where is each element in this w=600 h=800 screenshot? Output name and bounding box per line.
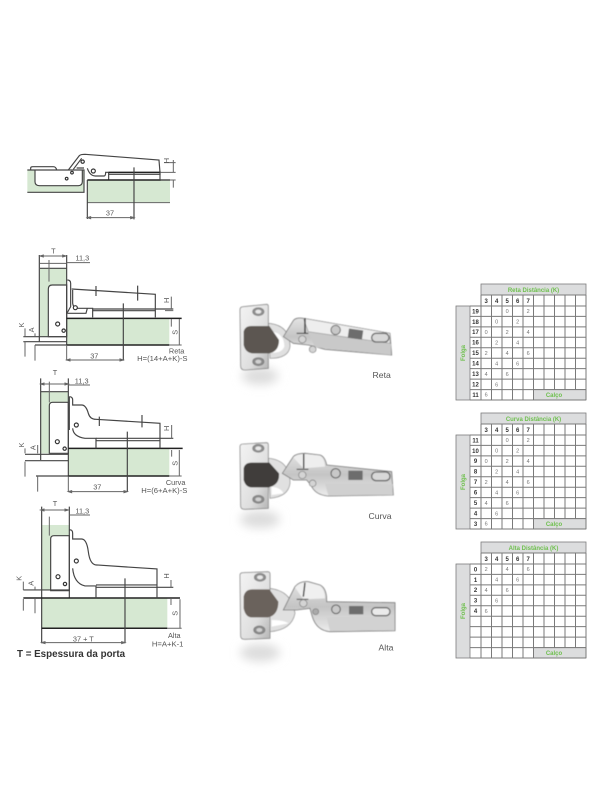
diagram: Curva mounting: Curva <box>166 478 186 487</box>
table: Curva: 0 <box>506 438 509 444</box>
diagram: Reta mounting: H <box>162 298 171 303</box>
diagram: Curva mounting: H=(6+A+K)-S <box>141 486 187 495</box>
diagram: Alta mounting: H <box>162 573 171 579</box>
table: Reta: 5 <box>506 299 510 305</box>
photo: Curva hinge: Curva <box>368 511 392 521</box>
table: Alta: 3 <box>474 599 478 605</box>
diagram: Curva mounting: T <box>53 368 58 377</box>
table: Reta: 6 <box>495 382 498 388</box>
table: Curva: 0 <box>495 449 498 455</box>
table: Alta: 6 <box>527 567 530 573</box>
table: Alta: Calço <box>546 651 563 657</box>
photo: Reta hinge <box>240 304 392 385</box>
diagram: Curva mounting: 37 <box>93 482 101 491</box>
diagram: Reta mounting: H=(14+A+K)-S <box>137 354 188 363</box>
diagram: Reta mounting: T <box>51 246 56 255</box>
table: Curva: Folga <box>461 473 467 490</box>
table: Curva: 4 <box>527 459 530 465</box>
table: Reta: 4 <box>485 372 488 378</box>
table: Alta: 0 <box>474 567 478 573</box>
table: Reta: 6 <box>506 372 509 378</box>
photo: Reta hinge: Reta <box>373 370 391 380</box>
diagram: top hinge side view <box>27 154 176 219</box>
diagram: Alta mounting: T <box>53 499 58 508</box>
table: Reta: 0 <box>485 330 488 336</box>
diagram: Alta mounting: H=A+K-1 <box>152 639 183 648</box>
table: Alta: 6 <box>506 588 509 594</box>
diagram: Alta mounting: K <box>14 576 23 581</box>
diagram: Curva mounting: 11,3 <box>75 376 89 385</box>
diagram: Reta mounting: S <box>170 330 179 335</box>
table: Alta: Alta Distância (K) <box>509 546 558 552</box>
table: Curva: 2 <box>516 449 519 455</box>
table: Reta: 6 <box>527 351 530 357</box>
table: Reta: 6 <box>516 299 520 305</box>
diagram: Reta mounting: Reta <box>169 346 185 355</box>
table: Alta: 2 <box>485 567 488 573</box>
table: Reta: 2 <box>516 320 519 326</box>
table: Reta <box>456 284 586 400</box>
table: Reta: 18 <box>472 320 479 326</box>
diagram: Curva mounting: A <box>29 445 38 450</box>
table: Reta: 0 <box>495 320 498 326</box>
table: Reta: 4 <box>495 299 499 305</box>
table: Reta: 16 <box>472 341 479 347</box>
photo: Curva hinge <box>240 443 393 528</box>
table: Curva: 2 <box>495 470 498 476</box>
table: Curva: 4 <box>506 480 509 486</box>
table: Alta: 4 <box>485 588 488 594</box>
table: Curva: 2 <box>485 480 488 486</box>
table: Curva: 4 <box>495 428 499 434</box>
table: Alta: 2 <box>474 588 478 594</box>
table: Reta: 14 <box>472 362 479 368</box>
table: Curva: 3 <box>485 428 489 434</box>
table: Alta: 4 <box>506 567 509 573</box>
diagram: Alta mounting: 37 + T <box>73 635 94 644</box>
table: Reta: 7 <box>527 299 531 305</box>
diagram: top hinge side view: 37 <box>106 208 114 217</box>
table: Curva: 6 <box>506 501 509 507</box>
table: Curva: 7 <box>474 480 478 486</box>
diagram: Reta mounting: 37 <box>90 351 98 360</box>
table: Curva <box>456 413 586 529</box>
table: Curva: 8 <box>474 470 478 476</box>
diagram: Curva mounting: H <box>162 426 171 431</box>
diagram: Alta mounting: 11,3 <box>75 507 89 516</box>
table: Curva: 6 <box>495 511 498 517</box>
diagram: Alta mounting: A <box>26 581 35 586</box>
table: Curva: 11 <box>472 438 479 444</box>
table: Reta: 13 <box>472 372 479 378</box>
table: Alta: 7 <box>527 557 531 563</box>
table: Reta: 2 <box>485 351 488 357</box>
table: Reta: 12 <box>472 382 479 388</box>
table: Reta: 4 <box>527 330 530 336</box>
table: Reta: 15 <box>472 351 479 357</box>
table: Alta: 4 <box>474 609 478 615</box>
table: Reta: 4 <box>516 340 519 346</box>
table: Alta: 5 <box>506 557 510 563</box>
table: Curva: Curva Distância (K) <box>506 417 561 423</box>
table: Curva: 6 <box>516 490 519 496</box>
photo: Alta hinge <box>240 572 395 661</box>
table: Reta: 6 <box>516 361 519 367</box>
table: Reta: 2 <box>506 330 509 336</box>
table: Reta: 4 <box>506 351 509 357</box>
table: Alta: 6 <box>485 609 488 615</box>
photo: Alta hinge: Alta <box>379 643 394 653</box>
table: Curva: 6 <box>516 428 520 434</box>
table: Curva: 10 <box>472 449 479 455</box>
table: Curva: 5 <box>506 428 510 434</box>
table: Curva: 2 <box>527 438 530 444</box>
table: Curva: 2 <box>506 459 509 465</box>
table: Alta: 1 <box>474 578 478 584</box>
diagram: Alta mounting <box>14 499 183 648</box>
table: Curva: 5 <box>474 501 478 507</box>
table: Reta: 11 <box>472 393 479 399</box>
table: Curva: 6 <box>527 480 530 486</box>
table: Curva: 9 <box>474 459 478 465</box>
table: Reta: 2 <box>495 340 498 346</box>
table: Curva: 4 <box>516 470 519 476</box>
table: Curva: 0 <box>485 459 488 465</box>
diagram: Reta mounting: A <box>27 327 36 332</box>
diagram: Reta mounting: K <box>17 322 26 327</box>
diagram: Reta mounting <box>17 246 188 363</box>
table: Alta <box>456 542 586 658</box>
table: Alta: 4 <box>495 557 499 563</box>
diagram: Reta mounting: 11,3 <box>75 254 89 263</box>
table: Alta: 6 <box>495 598 498 604</box>
diagram: Curva mounting: S <box>170 461 179 466</box>
table: Reta: 0 <box>506 309 509 315</box>
table: Reta: Calço <box>546 393 563 399</box>
table: Reta: 6 <box>485 393 488 399</box>
diagram: Alta mounting: Alta <box>168 631 182 640</box>
table: Alta: 6 <box>516 578 519 584</box>
table: Alta: Folga <box>461 602 467 619</box>
note: door thickness: T = Espessura da porta <box>17 649 126 660</box>
diagram: Curva mounting <box>17 368 187 495</box>
diagram: Alta mounting: S <box>170 611 179 616</box>
table: Alta: 6 <box>516 557 520 563</box>
diagram: top hinge side view: H <box>162 158 171 163</box>
table: Reta: Reta Distância (K) <box>508 288 559 294</box>
table: Reta: 19 <box>472 309 479 315</box>
table: Alta: 3 <box>485 557 489 563</box>
table: Reta: Folga <box>461 344 467 361</box>
table: Curva: 4 <box>485 501 488 507</box>
table: Alta: 4 <box>495 578 498 584</box>
table: Reta: 17 <box>472 330 479 336</box>
table: Reta: 3 <box>485 299 489 305</box>
table: Curva: 4 <box>495 490 498 496</box>
table: Curva: 6 <box>485 522 488 528</box>
table: Curva: Calço <box>546 522 563 528</box>
table: Curva: 6 <box>474 490 478 496</box>
table: Curva: 7 <box>527 428 531 434</box>
table: Reta: 2 <box>527 309 530 315</box>
table: Curva: 4 <box>474 511 478 517</box>
table: Reta: 4 <box>495 361 498 367</box>
diagram: Curva mounting: K <box>17 442 26 447</box>
table: Curva: 3 <box>474 522 478 528</box>
